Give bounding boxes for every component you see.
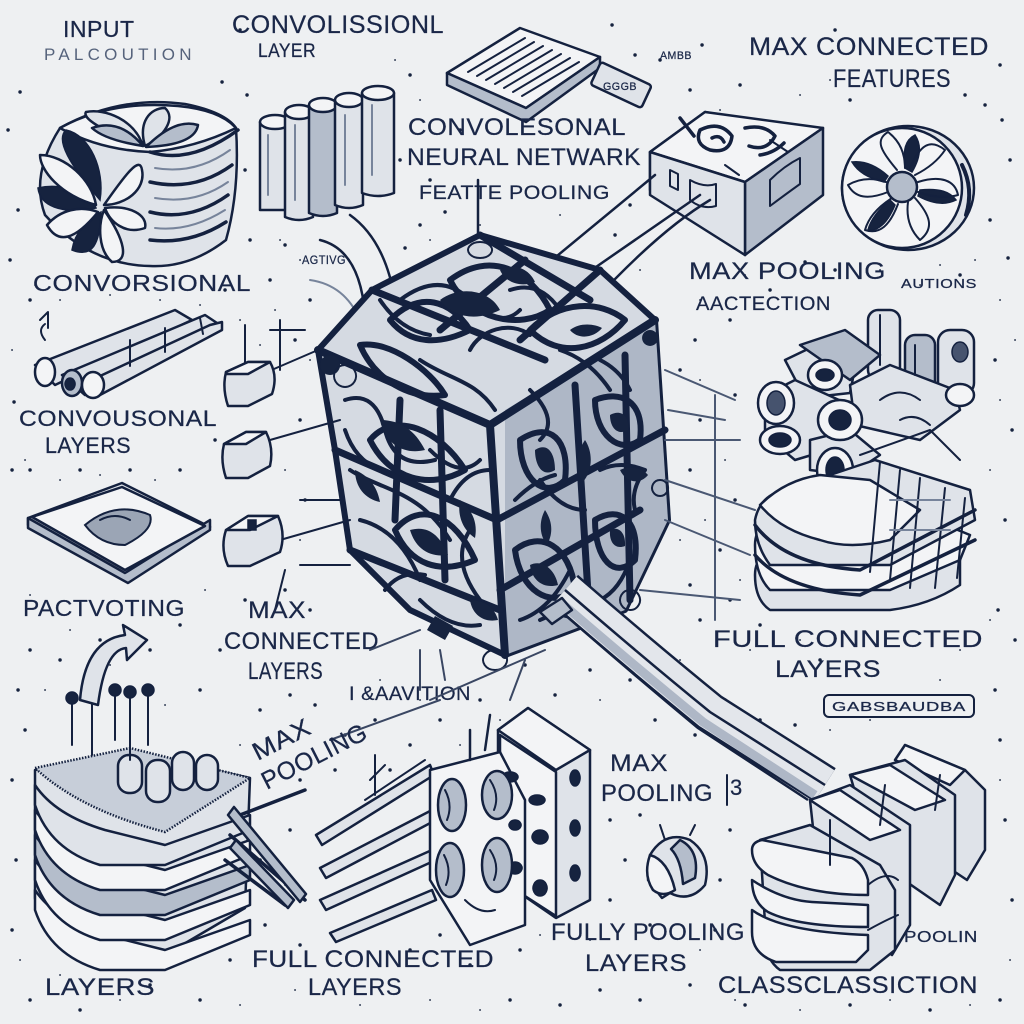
label: small tag bbox=[590, 50, 692, 108]
title: convolutional layer bbox=[232, 11, 444, 62]
title: convolutional layer: CONVOLISSIONL bbox=[232, 11, 444, 39]
icon: perforated panels bbox=[430, 708, 590, 945]
label: poolin: POOLIN bbox=[904, 929, 978, 946]
title: max pooling diagonal: MAX bbox=[248, 713, 316, 766]
title: max connected layers: CONNECTED bbox=[224, 628, 379, 655]
icon: central cube network bbox=[318, 235, 668, 670]
title: convolutional neural network: NEURAL NETWARK bbox=[407, 144, 641, 171]
title: convolutional layers: CONVOUSONAL bbox=[19, 406, 217, 431]
title: fully pooling layers bbox=[551, 919, 745, 977]
icon: right stacked blocks bbox=[755, 430, 975, 610]
title: convolutional layers: LAYERS bbox=[45, 433, 131, 458]
icon: curved arrow bbox=[80, 625, 147, 705]
label: small tag: AMBB bbox=[660, 50, 692, 62]
title: max pooling activation: MAX POOLING bbox=[689, 258, 886, 285]
icon: input cube with flower bbox=[38, 102, 238, 266]
pipes: connecting wires to the top of the cube bbox=[310, 175, 710, 320]
icon: small knob bbox=[647, 775, 727, 898]
title: classification: CLASSCLASSICTION bbox=[718, 972, 978, 999]
title: max connected layers bbox=[224, 597, 379, 685]
label: activation: I &AAVITION bbox=[349, 684, 471, 705]
title: max connected features: FEATURES bbox=[833, 65, 951, 93]
title: max connected layers: LAYERS bbox=[248, 658, 323, 685]
icon: top right junction box bbox=[650, 112, 823, 255]
title: convolutional layer: LAYER bbox=[258, 41, 316, 62]
label: badge bbox=[824, 695, 974, 717]
label: activ: AGTIVG bbox=[302, 253, 346, 267]
title: max connected features: MAX CONNECTED bbox=[749, 33, 989, 61]
icon: fan bbox=[842, 126, 974, 250]
title: input bbox=[44, 16, 192, 64]
icon: filter plate bbox=[447, 28, 600, 122]
title: full connected layers: LAYERS bbox=[775, 656, 881, 683]
title: convolutional neural network: FEATTE POOLING bbox=[419, 183, 610, 204]
title: max pooling diagonal bbox=[243, 691, 372, 795]
icon: horizontal tubes bbox=[35, 310, 222, 398]
title: max connected layers: MAX bbox=[248, 597, 306, 624]
title: max pooling activation bbox=[689, 258, 977, 315]
title: full connected layers: FULL CONNECTED bbox=[713, 626, 983, 653]
title: max pooling: 3 bbox=[730, 775, 743, 800]
title: max connected features bbox=[749, 33, 989, 93]
icon: bottom right blocks bbox=[752, 745, 985, 970]
title: convorsional: CONVORSIONAL bbox=[33, 270, 251, 296]
title: max pooling activation: AACTECTION bbox=[696, 294, 831, 315]
label: badge: GABSBAUDBA bbox=[832, 699, 966, 714]
icon: connector lines to right stacks bbox=[640, 370, 755, 620]
label: small tag: GGGB bbox=[603, 81, 637, 93]
title: pactvoting: PACTVOTING bbox=[23, 595, 185, 621]
title: max pooling diagonal: POOLING bbox=[257, 718, 372, 795]
title: convolutional neural network: CONVOLESONAL bbox=[408, 114, 626, 141]
title: fully pooling layers: LAYERS bbox=[585, 950, 687, 977]
title: full connected layers bbox=[713, 626, 983, 683]
icon: bottom left layered stack bbox=[35, 684, 306, 970]
icon: rods bbox=[316, 755, 436, 942]
title: fully pooling layers: FULLY POOLING bbox=[551, 919, 745, 946]
icon: small connectors left of cube bbox=[222, 320, 350, 610]
icon: flat plate bbox=[28, 483, 210, 583]
icon: cylinders bbox=[260, 86, 394, 220]
title: max pooling: POOLING bbox=[601, 780, 713, 807]
title: convolutional neural network bbox=[407, 114, 641, 204]
decorative wires under cube bbox=[330, 630, 545, 740]
title: max pooling: MAX bbox=[610, 750, 668, 777]
title: input: INPUT bbox=[63, 16, 134, 42]
title: max pooling activation: AUTIONS bbox=[901, 276, 977, 291]
icon: right tube cluster bbox=[758, 310, 974, 492]
title: convolutional layers bbox=[19, 406, 217, 458]
title: input: PALCOUTION bbox=[44, 45, 192, 64]
title: full connected layers bottom: FULL CONNECTED bbox=[252, 946, 494, 973]
title: full connected layers bottom bbox=[252, 946, 494, 1001]
icon: pipes to bottom right blocks bbox=[540, 590, 825, 800]
title: layers bottom left: LAYERS bbox=[45, 974, 155, 1001]
title: full connected layers bottom: LAYERS bbox=[308, 974, 402, 1001]
title: max pooling bbox=[601, 750, 743, 807]
